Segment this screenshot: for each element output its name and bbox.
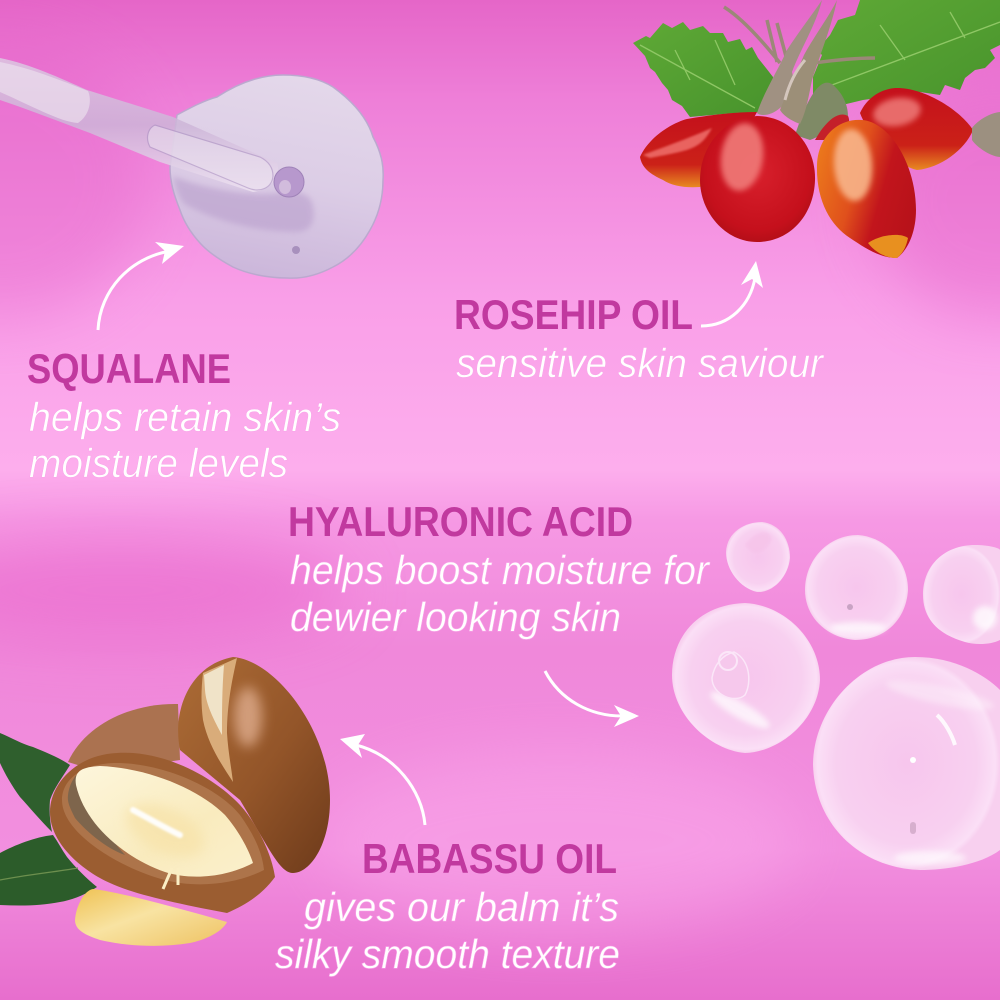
shell split <box>202 658 237 782</box>
open nut <box>50 753 275 913</box>
heading: SQUALANE <box>27 345 231 392</box>
label: hyaluronic acid: dewier looking skin <box>290 594 621 640</box>
babassu nuts image <box>0 657 330 946</box>
description: helps retain skin’s <box>29 394 341 440</box>
halved nut <box>178 657 330 873</box>
description: gives our balm it’s <box>304 884 619 930</box>
label: hyaluronic acid <box>288 498 711 640</box>
babassu leaves <box>0 733 70 832</box>
oil puddle <box>75 889 227 946</box>
arrow: babassu <box>340 734 425 825</box>
arrow: squalane <box>98 242 184 330</box>
arrow: rosehip <box>701 261 763 326</box>
rosehip berries <box>640 112 757 187</box>
rosehip image <box>633 0 1000 258</box>
squalane oil drop <box>170 75 383 278</box>
squalane drop and pipette image <box>0 58 383 278</box>
heading: BABASSU OIL <box>362 835 617 882</box>
description: sensitive skin saviour <box>456 340 825 386</box>
rosehip centre bud <box>795 83 848 140</box>
label: babassu oil: silky smooth texture <box>275 931 620 977</box>
back nut <box>68 704 180 772</box>
rosehip sepals <box>757 0 822 115</box>
arrow: hyaluronic acid <box>545 671 639 727</box>
label: babassu oil <box>275 835 620 977</box>
pipette <box>0 58 304 197</box>
heading: HYALURONIC ACID <box>288 498 633 545</box>
label: squalane: moisture levels <box>29 440 288 486</box>
hyaluronic acid gel drops <box>672 522 1000 870</box>
label: squalane <box>27 345 341 486</box>
butter kernel <box>76 766 253 877</box>
heading: ROSEHIP OIL <box>454 291 693 338</box>
rosehip leaves <box>633 22 775 117</box>
label: rosehip oil <box>454 291 825 386</box>
rosehip stems <box>724 7 875 63</box>
description: helps boost moisture for <box>290 547 711 593</box>
